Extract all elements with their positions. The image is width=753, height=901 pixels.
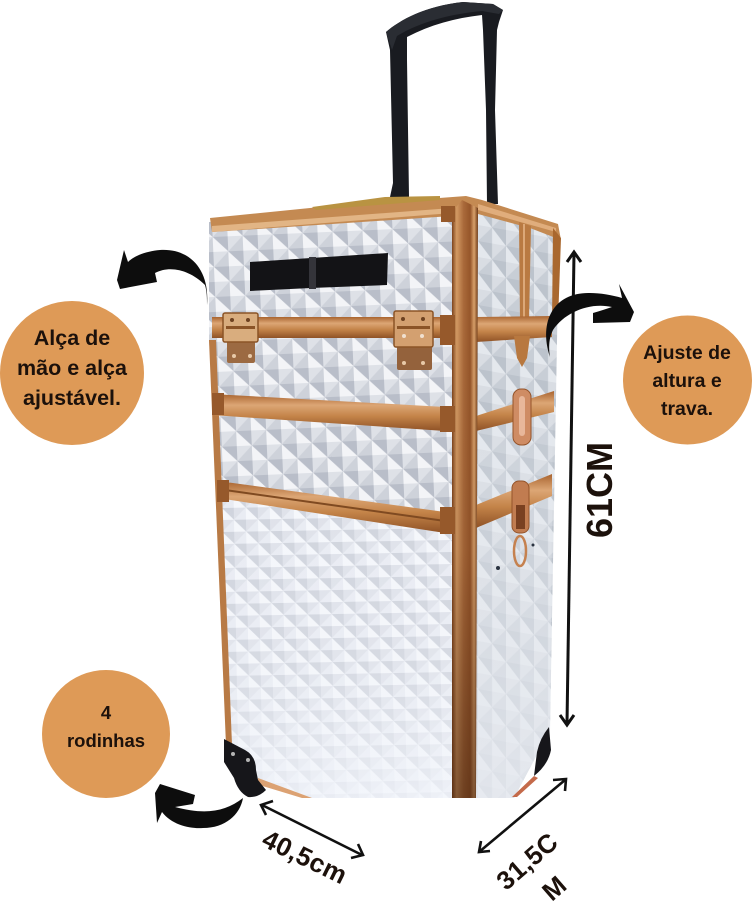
callout text: ajustável. — [23, 386, 121, 410]
callout text: altura e — [652, 370, 722, 392]
top frame rail — [210, 196, 561, 240]
side vertical strap — [519, 222, 531, 322]
icon: side lower latch — [512, 481, 529, 566]
side face rivets — [496, 544, 534, 570]
front band 1 — [212, 317, 452, 338]
callout text: 4 — [101, 702, 112, 723]
callout text: Alça de — [34, 326, 110, 350]
callout: hand strap — [0, 301, 144, 445]
icon: right front latch — [394, 311, 433, 370]
circle badge — [42, 670, 170, 798]
label: width: 40,5cm — [258, 824, 352, 890]
arrow: height dimension — [560, 252, 581, 725]
icon: telescopic trolley handle — [386, 2, 503, 204]
circle badge — [623, 316, 752, 444]
arrow: to hand strap callout — [117, 250, 207, 305]
suitcase — [209, 196, 561, 798]
panel: front diamond face — [209, 212, 452, 798]
front band 3 — [218, 481, 445, 533]
callout text: Ajuste de — [643, 342, 731, 364]
callout: height adjustment — [623, 316, 752, 444]
icon: left rear wheel bracket — [224, 739, 312, 798]
arrow: depth dimension — [479, 779, 566, 852]
icon: black hand strap — [250, 253, 388, 291]
icon: side middle latch — [513, 389, 531, 445]
front band 2 — [212, 394, 445, 431]
label: height: 61CM — [579, 442, 620, 538]
panel: side diamond face — [476, 206, 559, 798]
side band 1 — [476, 316, 552, 342]
callout text: rodinhas — [67, 730, 145, 751]
icon: side upper clasp — [514, 336, 530, 367]
arrow: to height callout — [546, 284, 634, 357]
callout: wheels — [42, 670, 170, 798]
callout text: mão e alça — [17, 356, 128, 380]
centre corner pillar — [452, 200, 478, 798]
icon: right wheel bracket — [512, 727, 551, 797]
arrow: to wheels callout — [155, 784, 243, 828]
corner brackets — [212, 206, 455, 534]
side top edge — [552, 228, 561, 322]
icon: left front latch — [223, 313, 258, 363]
arrow: width dimension — [261, 801, 363, 858]
left edge trim — [209, 340, 232, 745]
side band 2 — [476, 391, 554, 431]
circle badge — [0, 301, 144, 445]
side band 3 — [476, 474, 552, 528]
callout text: trava. — [661, 398, 713, 420]
label: depth: 31,5C — [490, 826, 564, 896]
